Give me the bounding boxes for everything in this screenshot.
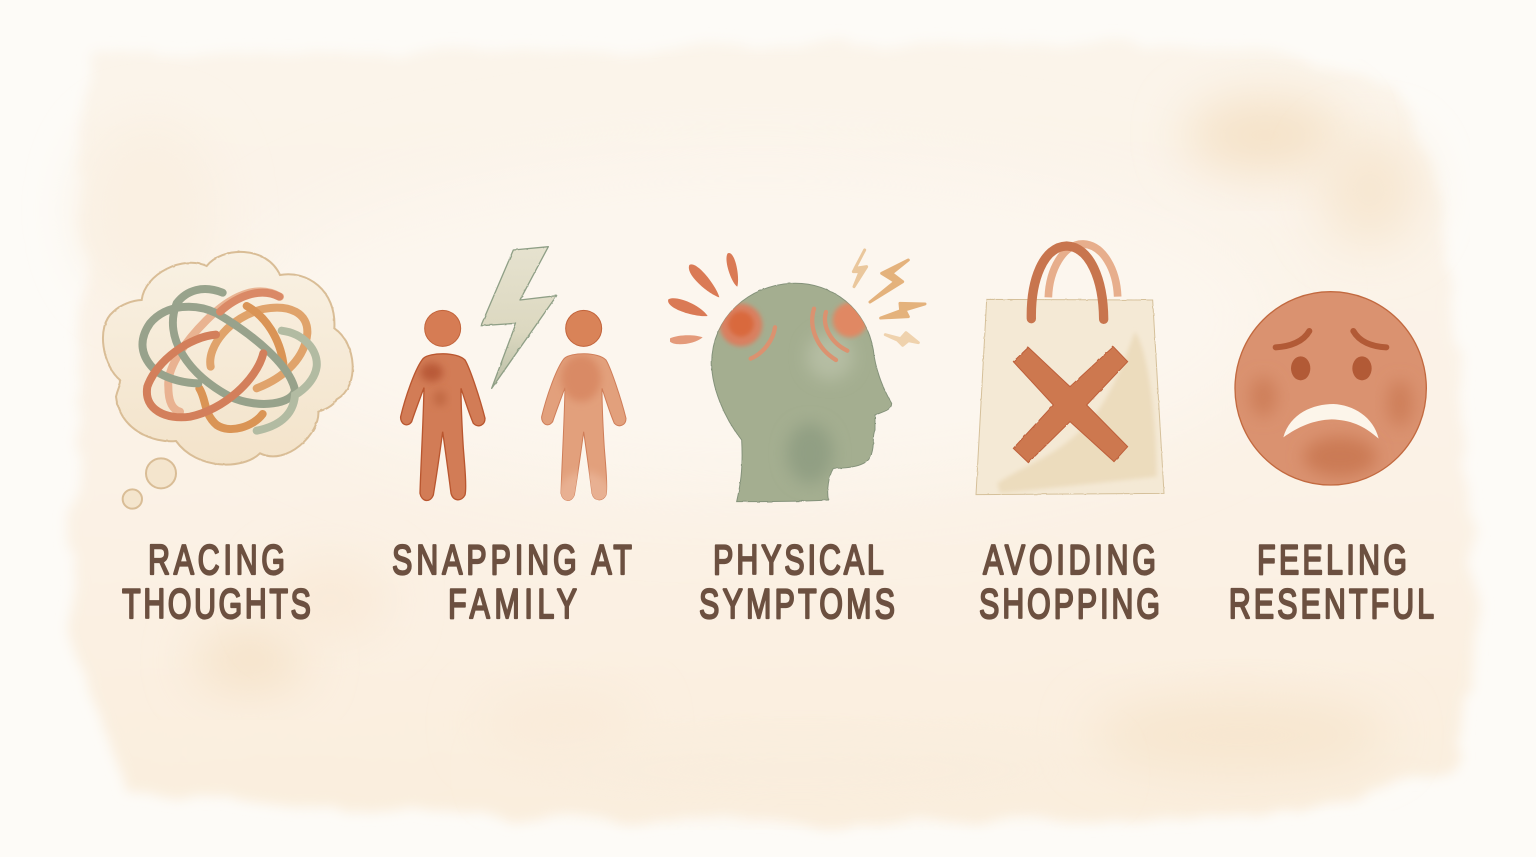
back handle	[1048, 244, 1118, 297]
label: racing thoughts: THOUGHTS	[122, 580, 311, 627]
label: feeling resentful	[1229, 536, 1434, 627]
mouth	[1283, 404, 1379, 439]
label: avoiding shopping	[979, 536, 1160, 627]
label: physical symptoms	[699, 536, 895, 627]
pain arcs	[751, 309, 847, 360]
thought bubbles	[123, 458, 176, 509]
pain spots	[720, 304, 762, 346]
lightning sparks	[853, 250, 925, 345]
icon: shopping bag crossed out	[976, 244, 1426, 495]
bag body	[976, 299, 1164, 495]
X mark	[1013, 347, 1128, 463]
front handle	[1031, 246, 1104, 319]
label: avoiding shopping: AVOIDING	[983, 536, 1156, 583]
label: physical symptoms: PHYSICAL	[713, 536, 884, 583]
label: snapping at family: SNAPPING AT	[392, 536, 632, 583]
sad face	[1235, 292, 1426, 485]
person right	[541, 310, 626, 501]
person left	[401, 310, 485, 500]
label: avoiding shopping: SHOPPING	[979, 580, 1160, 627]
icon: head with headache	[668, 250, 925, 502]
pain rays	[668, 253, 738, 344]
thought cloud	[103, 252, 353, 465]
label: feeling resentful: FEELING	[1257, 536, 1407, 583]
tangled lines	[142, 289, 317, 431]
label: snapping at family	[392, 536, 632, 627]
head silhouette	[712, 283, 892, 502]
label: racing thoughts	[122, 536, 311, 627]
eyebrows	[1276, 331, 1386, 347]
label: racing thoughts: RACING	[148, 536, 285, 583]
icon: two people with lightning	[401, 247, 626, 532]
icon: tangled thoughts cloud	[103, 252, 353, 509]
label: feeling resentful: RESENTFUL	[1229, 580, 1434, 627]
lightning bolt	[481, 247, 557, 388]
label: snapping at family: FAMILY	[448, 580, 577, 627]
eyes	[1291, 356, 1372, 380]
label: physical symptoms: SYMPTOMS	[699, 580, 895, 627]
